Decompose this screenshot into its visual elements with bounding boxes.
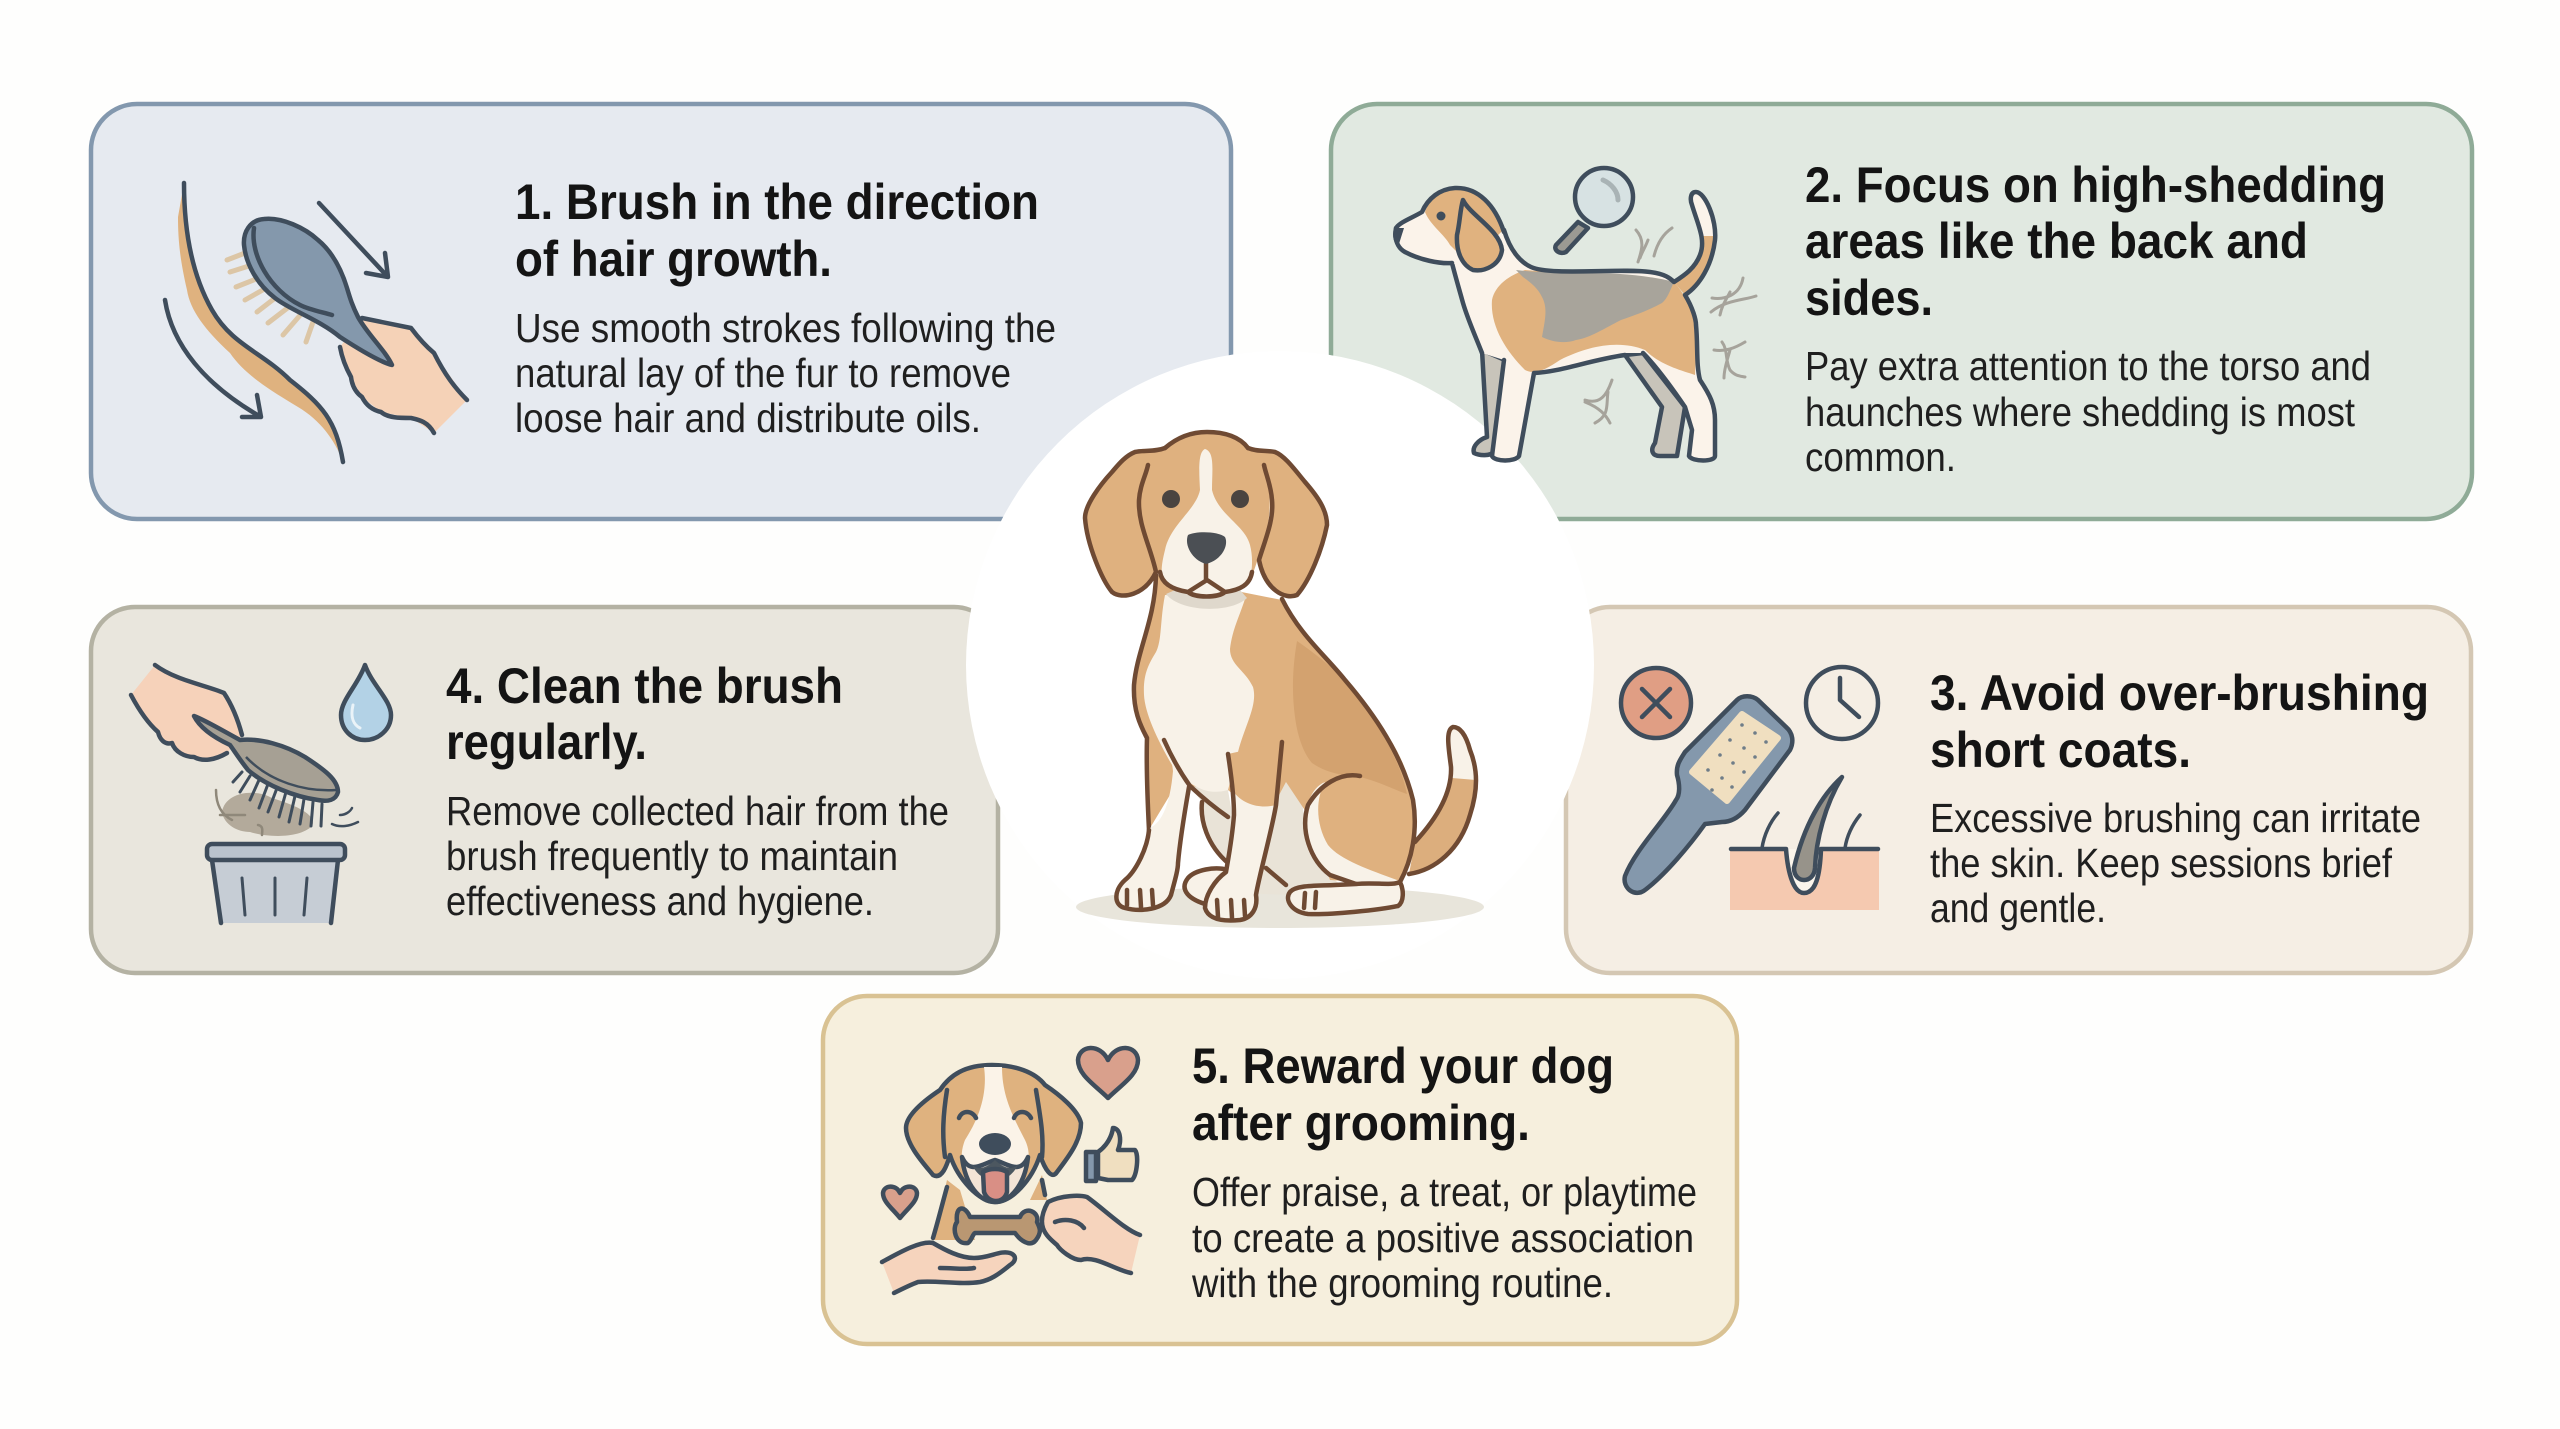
skin cross-section <box>1730 849 1879 910</box>
icon: brush on fur with arrows <box>165 183 467 462</box>
body text: to create a positive association <box>1192 1215 1694 1261</box>
heading <box>1192 1038 1614 1151</box>
panel 3 background <box>1566 607 2471 973</box>
rear paw <box>1288 882 1403 914</box>
body text: brush frequently to maintain <box>446 833 898 879</box>
left hand <box>882 1243 1015 1293</box>
heading: 3. Avoid over-brushing <box>1930 665 2429 721</box>
body text: and gentle. <box>1930 885 2106 931</box>
neck shadow <box>1166 590 1247 609</box>
heading: 1. Brush in the direction <box>515 174 1039 230</box>
body text <box>446 788 949 924</box>
heading: 5. Reward your dog <box>1192 1038 1614 1094</box>
center illustration: sitting beagle <box>1076 432 1484 928</box>
icon: paddle brush, warning, clock and skin follicle <box>1621 667 1879 910</box>
small brush <box>194 716 338 801</box>
body text <box>1930 795 2421 931</box>
heading: 2. Focus on high-shedding <box>1805 157 2386 213</box>
tail <box>1674 192 1715 295</box>
panel 3: avoid over-brushing short coats <box>1566 607 2471 973</box>
bone <box>955 1209 1040 1243</box>
body text: Pay extra attention to the torso and <box>1805 343 2371 389</box>
panel 4: clean the brush regularly <box>91 607 998 973</box>
heading: of hair growth. <box>515 231 832 287</box>
center white circle backdrop <box>966 351 1594 979</box>
saddle shading <box>1293 641 1407 794</box>
front left leg <box>1116 740 1189 910</box>
bin <box>212 860 338 923</box>
ear <box>1457 200 1502 270</box>
body text: Remove collected hair from the <box>446 788 949 834</box>
body text: the skin. Keep sessions brief <box>1930 840 2393 886</box>
heading: short coats. <box>1930 722 2191 778</box>
panel 2: focus on high-shedding areas <box>1331 104 2472 519</box>
heading <box>1930 665 2429 778</box>
icon: magnifier over standing dog with loose hair <box>1393 168 1756 460</box>
icon: happy dog with bone, hearts and thumbs up <box>882 1048 1140 1293</box>
haunch white crescent <box>1304 782 1400 884</box>
heading: regularly. <box>446 714 647 770</box>
ground shadow <box>1076 886 1484 928</box>
bristles <box>233 772 322 826</box>
body text: loose hair and distribute oils. <box>515 395 981 441</box>
heading: after grooming. <box>1192 1095 1530 1151</box>
body text: with the grooming routine. <box>1191 1260 1613 1306</box>
heading: 4. Clean the brush <box>446 658 843 714</box>
body text: common. <box>1805 434 1956 480</box>
body text: natural lay of the fur to remove <box>515 350 1011 396</box>
panel 5: reward your dog after grooming <box>823 996 1737 1344</box>
nose <box>1187 532 1226 564</box>
icon: hand cleaning brush over bin with water drop <box>131 665 391 923</box>
blaze <box>1162 449 1252 596</box>
heading <box>1805 157 2386 326</box>
water drop <box>341 665 391 740</box>
body text: Excessive brushing can irritate <box>1930 795 2421 841</box>
hair clump <box>222 793 313 836</box>
eyes <box>1162 490 1180 508</box>
heading: areas like the back and <box>1805 213 2308 269</box>
muzzle <box>1160 563 1252 596</box>
panel 1: brush in the direction of hair growth <box>91 104 1231 519</box>
body text: Offer praise, a treat, or playtime <box>1192 1169 1697 1215</box>
head <box>1395 188 1504 270</box>
loose hairs <box>1585 228 1756 423</box>
head <box>1085 432 1327 596</box>
body text <box>1805 343 2371 480</box>
panel 5 background <box>823 996 1737 1344</box>
tail <box>1409 727 1476 874</box>
body fill <box>1134 575 1415 885</box>
body <box>1452 230 1715 460</box>
far legs <box>1474 350 1505 455</box>
body text: haunches where shedding is most <box>1805 389 2356 435</box>
body text: Use smooth strokes following the <box>515 305 1056 351</box>
hind paw between legs <box>1185 868 1228 904</box>
left ear <box>1085 448 1165 596</box>
panel 1 background <box>91 104 1231 519</box>
body outline <box>1134 575 1415 882</box>
heading <box>446 658 843 770</box>
heading <box>515 174 1039 287</box>
standing dog <box>1393 188 1716 461</box>
body text <box>515 305 1056 441</box>
panel 4 background <box>91 607 998 973</box>
right hand <box>1042 1196 1140 1273</box>
white chest <box>1144 595 1254 792</box>
belly behind legs <box>1190 770 1340 895</box>
body text <box>1191 1169 1697 1306</box>
front center leg <box>1228 742 1282 810</box>
panel 2 background <box>1331 104 2472 519</box>
hand <box>131 665 242 760</box>
magnifier <box>1555 168 1633 253</box>
right ear <box>1248 448 1327 596</box>
body text: effectiveness and hygiene. <box>446 878 874 924</box>
heading: sides. <box>1805 270 1933 326</box>
